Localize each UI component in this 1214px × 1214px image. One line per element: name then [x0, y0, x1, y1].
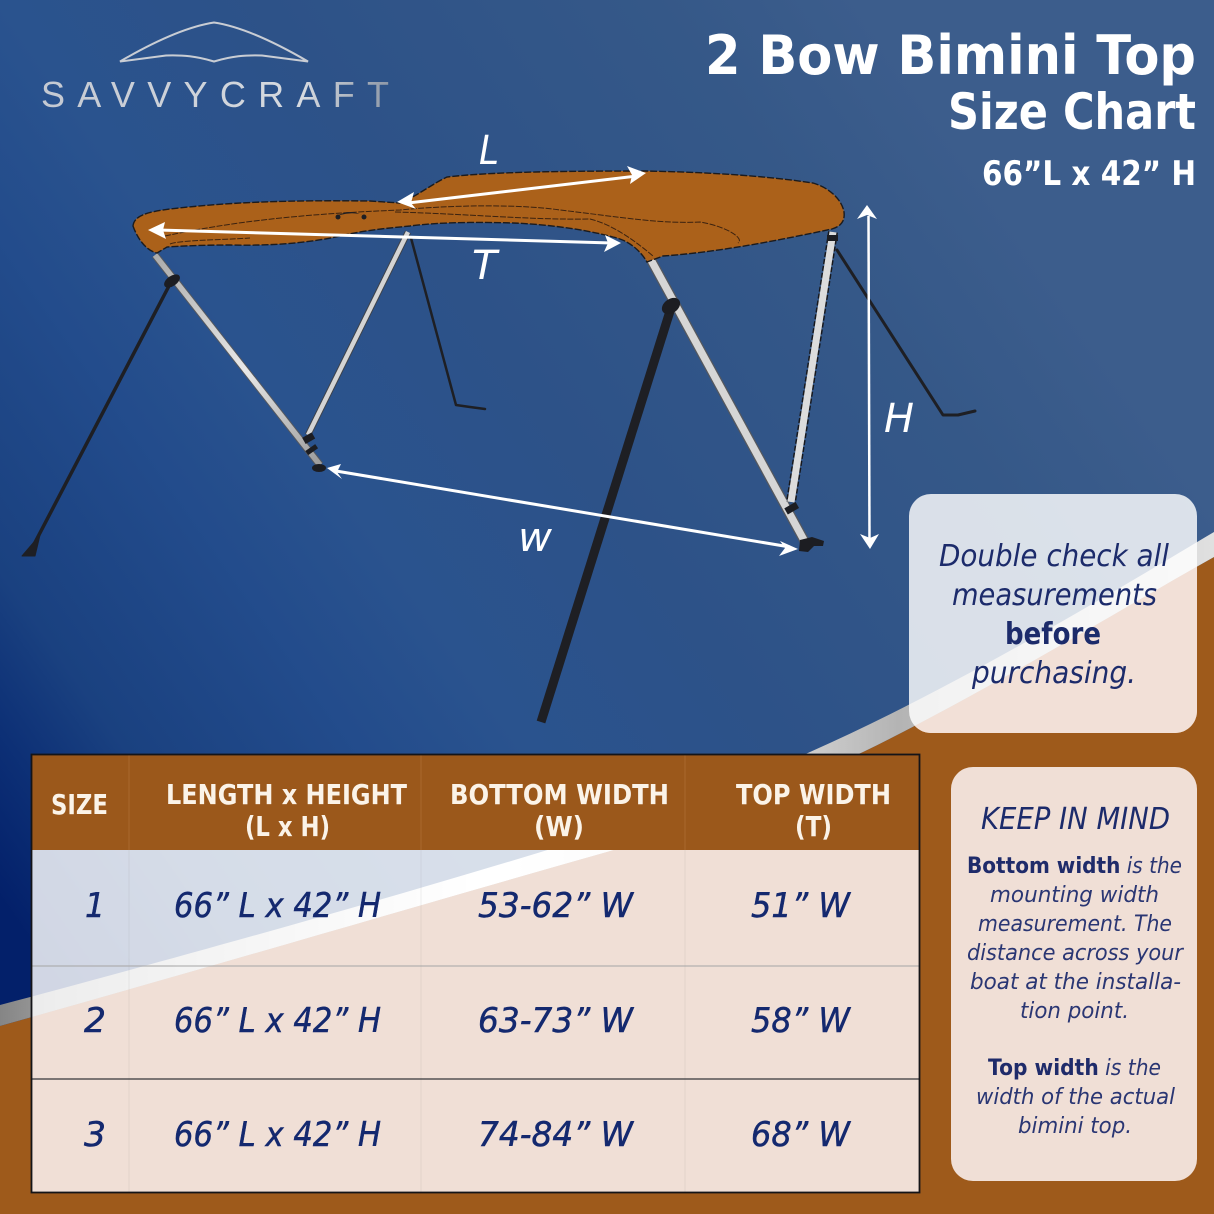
bottom width note: distance across your [967, 941, 1185, 966]
logo [41, 22, 389, 115]
header labels: SIZE [51, 788, 108, 821]
logo wordmark: SAVVYCRAFT [41, 74, 389, 115]
header labels: LENGTH x HEIGHT [166, 778, 407, 811]
row: size 1 [85, 886, 851, 926]
top width note [976, 1056, 1175, 1139]
bottom width note: measurement. The [978, 912, 1172, 937]
row: size 3: 74-84” W [478, 1115, 634, 1155]
callout text: purchasing. [971, 656, 1136, 691]
header labels: TOP WIDTH [736, 778, 891, 811]
keep in mind heading: KEEP IN MIND [981, 802, 1170, 837]
row: size 3: 68” W [751, 1115, 851, 1155]
arrow: length [397, 166, 646, 209]
canopy [133, 171, 844, 262]
table body [32, 850, 919, 1192]
bottom width note [967, 854, 1185, 1024]
label L: L [479, 128, 499, 174]
row: size 2 [84, 1001, 851, 1041]
callout: double check [909, 494, 1197, 733]
callout text [939, 539, 1170, 691]
label T: T [472, 243, 501, 289]
pole collars and feet [162, 235, 838, 552]
row: size 3: 66” L x 42” H [174, 1115, 381, 1155]
logo mark [120, 22, 308, 62]
bottom width note: boat at the installa- [970, 970, 1181, 995]
callout text: Double check all [939, 539, 1170, 574]
header labels: BOTTOM WIDTH [450, 778, 669, 811]
panel: size table [30, 754, 920, 1194]
label H: H [884, 396, 914, 442]
label W: w [518, 515, 552, 561]
header labels: (W) [534, 810, 584, 843]
canopy seams [165, 206, 739, 256]
row: size 3: 3 [84, 1115, 106, 1155]
bottom width note: Bottom width is the [967, 854, 1182, 879]
row: size 1: 66” L x 42” H [174, 886, 381, 926]
table header [32, 755, 919, 850]
callout text: before [1005, 617, 1101, 652]
row: size 3 [84, 1115, 851, 1155]
dark support straps [22, 238, 975, 722]
header labels [51, 778, 891, 843]
title line 1: 2 Bow Bimini Top [705, 24, 1196, 87]
arrow: top width [148, 222, 621, 252]
callout text: measurements [952, 578, 1157, 613]
row: size 1: 53-62” W [478, 886, 634, 926]
row: size 1: 1 [85, 886, 105, 926]
header labels: (T) [795, 810, 832, 843]
bimini top diagram [22, 128, 975, 722]
canopy bracket [336, 212, 366, 220]
row: size 2: 58” W [751, 1001, 851, 1041]
arrow: bottom width [327, 464, 798, 556]
bottom width note: mounting width [990, 883, 1159, 908]
panel: keep in mind [951, 767, 1197, 1181]
top width note: width of the actual [976, 1085, 1175, 1110]
aluminium poles [155, 232, 833, 542]
row: size 1: 51” W [751, 886, 851, 926]
row: size 2: 2 [84, 1001, 106, 1041]
top width note: Top width is the [988, 1056, 1161, 1081]
row: size 2: 63-73” W [478, 1001, 634, 1041]
row: size 2: 66” L x 42” H [174, 1001, 381, 1041]
header labels: (L x H) [245, 810, 330, 843]
top width note: bimini top. [1018, 1114, 1132, 1139]
title [705, 24, 1196, 194]
arrow: height [857, 205, 879, 549]
bottom width note: tion point. [1020, 999, 1129, 1024]
